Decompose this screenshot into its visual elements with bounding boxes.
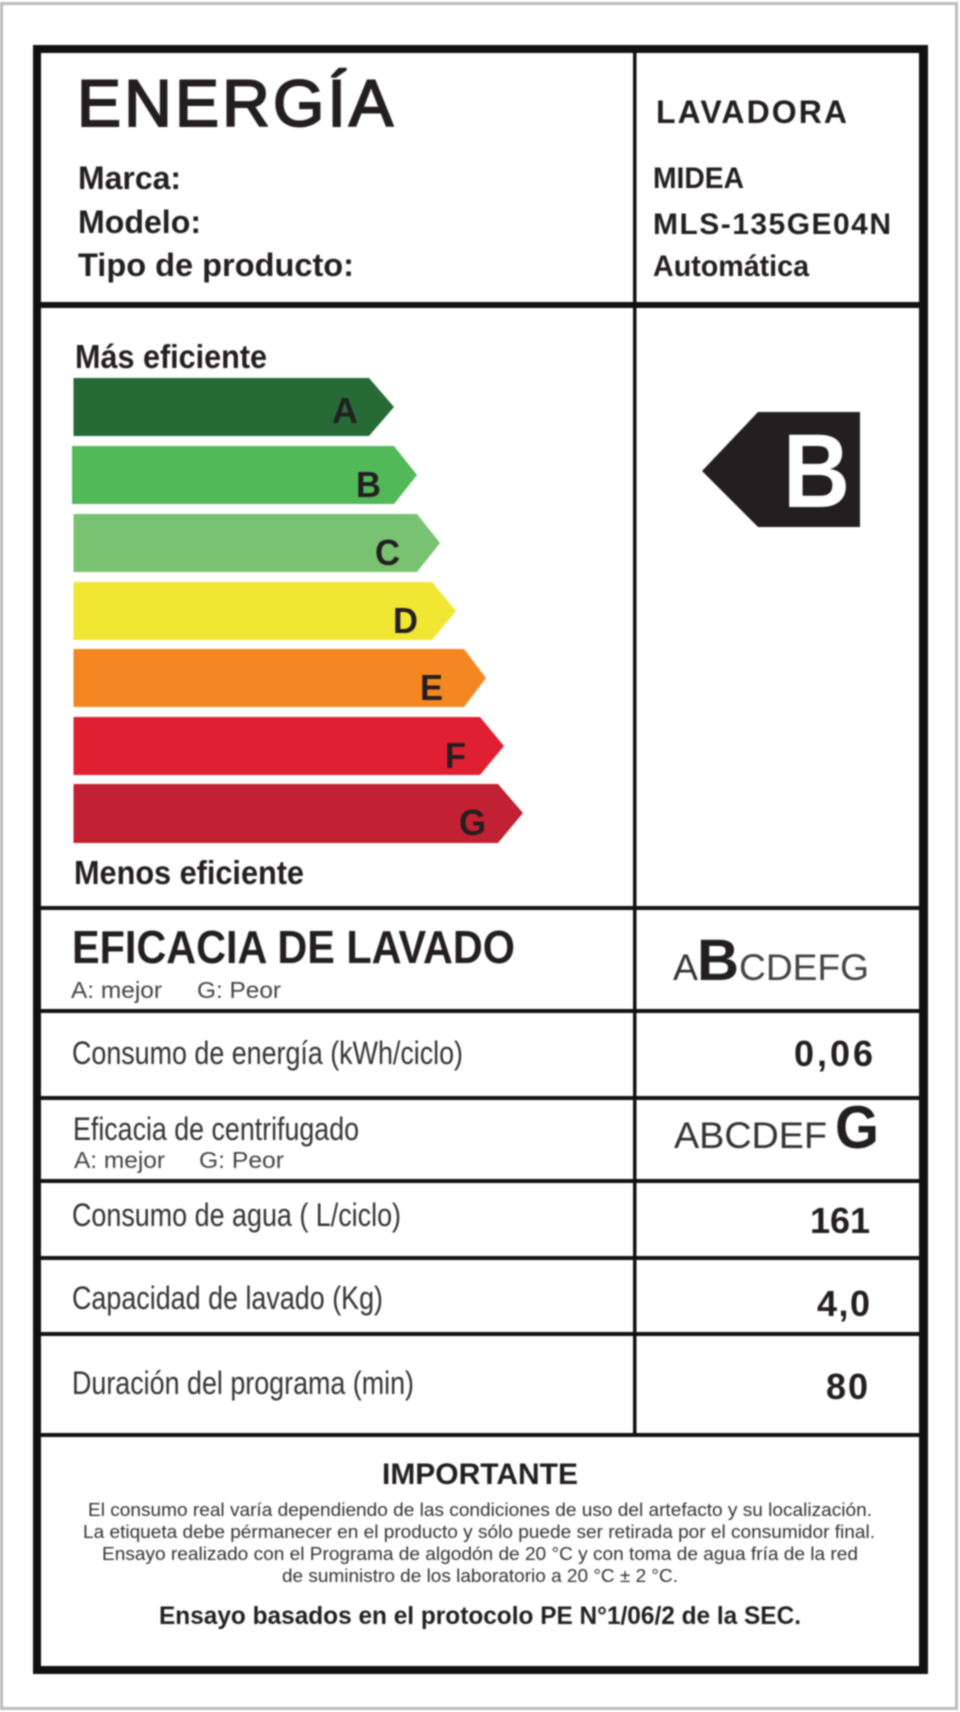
- row: spin efficacy: A: mejor: [74, 1147, 165, 1173]
- row: washing efficacy: A: [673, 947, 698, 988]
- row: spin efficacy: G: Peor: [199, 1147, 284, 1173]
- type value: Automática: [653, 250, 809, 283]
- row: program duration: Duración del programa (min): [72, 1365, 414, 1401]
- arrow G: G: [459, 802, 486, 843]
- notice body: La etiqueta debe pérmanecer en el producto y sólo puede ser retirada por el consumidor final.: [83, 1522, 875, 1542]
- title: ENERGÍA: [77, 66, 393, 140]
- row: water consumption: 161: [810, 1200, 870, 1241]
- arrow B: [72, 446, 417, 505]
- arrow C: [74, 514, 440, 573]
- row: program duration: 80: [826, 1366, 868, 1407]
- row: program duration: [72, 1365, 868, 1407]
- protocol note: Ensayo basados en el protocolo PE N°1/06/2 de la SEC.: [159, 1602, 801, 1630]
- row: water consumption: [72, 1197, 870, 1241]
- row: energy consumption: Consumo de energía (kWh/ciclo): [72, 1035, 463, 1071]
- header panel: [77, 66, 891, 283]
- arrow D: D: [393, 600, 418, 641]
- arrow D: [74, 582, 456, 641]
- row: energy consumption: [72, 1033, 873, 1074]
- row: washing efficacy: B: [697, 928, 739, 993]
- row: washing efficacy: A: mejor: [71, 977, 162, 1003]
- rating badge B: B: [783, 413, 850, 530]
- row: washing efficacy: G: Peor: [197, 977, 281, 1003]
- arrow E: E: [420, 667, 443, 708]
- notice body: [83, 1500, 875, 1586]
- energy scale panel: [72, 338, 523, 891]
- notice body: El consumo real varía dependiendo de las condiciones de uso del artefacto y su localización.: [88, 1500, 872, 1520]
- most efficient heading: Más eficiente: [75, 338, 267, 375]
- row: washing efficacy: [71, 921, 869, 1003]
- arrow E: [74, 649, 486, 708]
- row: spin efficacy: G: [835, 1094, 879, 1161]
- field: product type label: Tipo de producto:: [78, 247, 354, 283]
- model value: MLS-135GE04N: [653, 208, 891, 241]
- arrow A: A: [332, 390, 358, 431]
- arrow C: C: [375, 532, 400, 573]
- row: wash capacity: 4,0: [817, 1283, 870, 1324]
- rating badge B: [702, 412, 860, 530]
- product type: LAVADORA: [656, 94, 847, 130]
- row: wash capacity: [72, 1280, 870, 1324]
- row: spin efficacy: ABCDEF: [674, 1115, 827, 1156]
- row: spin efficacy: [73, 1094, 879, 1173]
- arrow F: F: [445, 735, 466, 776]
- field: brand label: Marca:: [78, 160, 181, 196]
- brand value: MIDEA: [653, 162, 744, 195]
- row: wash capacity: Capacidad de lavado (Kg): [72, 1280, 383, 1316]
- least efficient heading: Menos eficiente: [74, 854, 304, 891]
- notice body: Ensayo realizado con el Programa de algodón de 20 °C y con toma de agua fría de la red: [102, 1544, 858, 1564]
- row: water consumption: Consumo de agua ( L/ciclo): [72, 1197, 401, 1233]
- arrow B: B: [356, 464, 381, 505]
- important notice: [83, 1458, 875, 1630]
- arrow G: [74, 784, 523, 843]
- notice heading: IMPORTANTE: [382, 1458, 578, 1491]
- row: energy consumption: 0,06: [794, 1033, 873, 1074]
- row: spin efficacy: Eficacia de centrifugado: [73, 1111, 359, 1147]
- notice body: de suministro de los laboratorio a 20 °C ± 2 °C.: [282, 1566, 678, 1586]
- field: model label: Modelo:: [78, 204, 201, 240]
- arrow A: [74, 378, 394, 436]
- arrow F: [74, 717, 504, 776]
- row: washing efficacy: CDEFG: [739, 947, 869, 988]
- row: washing efficacy: EFICACIA DE LAVADO: [72, 921, 515, 973]
